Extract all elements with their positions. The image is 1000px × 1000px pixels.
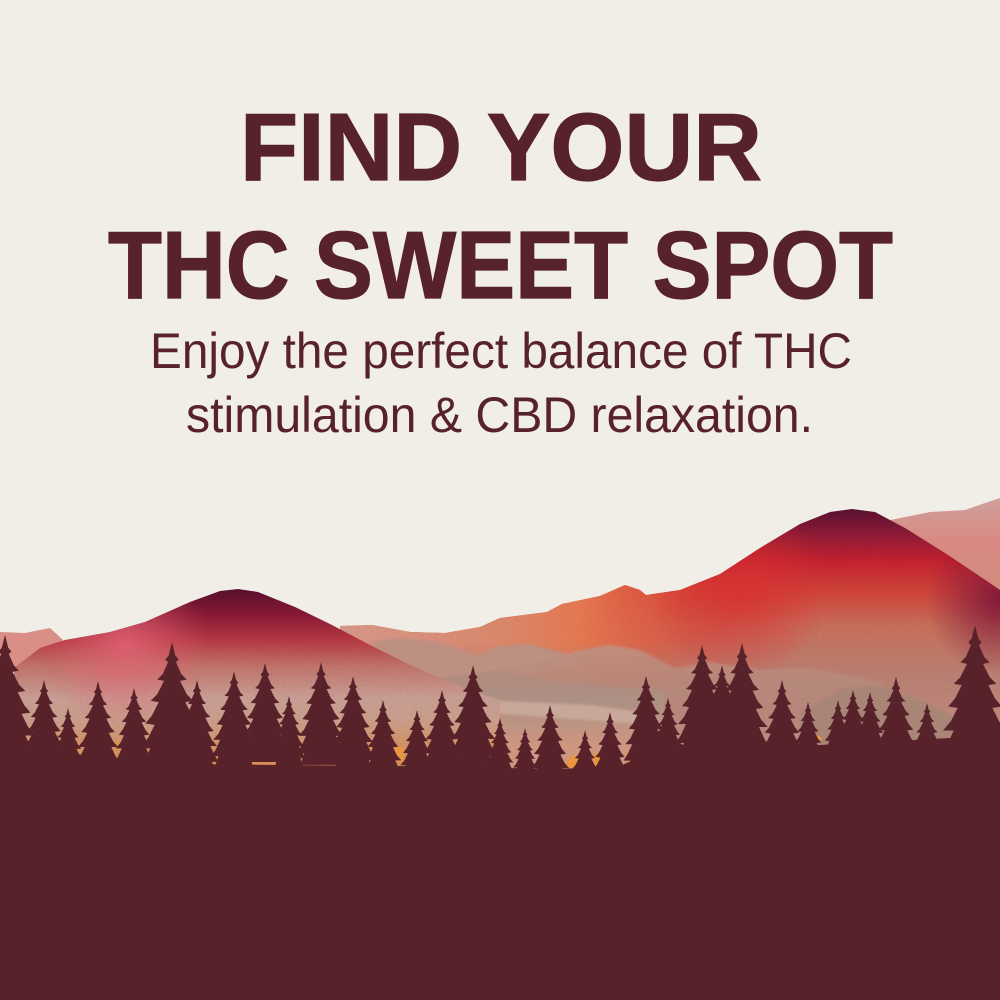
title: FIND YOUR (240, 94, 762, 201)
right trees (676, 625, 1000, 776)
subtitle: stimulation & CBD relaxation. (186, 387, 813, 443)
left mountain (14, 589, 500, 766)
subtitle: Enjoy the perfect balance of THC (150, 323, 852, 379)
left trees (0, 635, 515, 789)
subtitle (150, 323, 852, 443)
title: THC SWEET SPOT (108, 212, 893, 319)
mountain landscape (0, 498, 1000, 780)
far ridge right (860, 498, 1000, 640)
orange flecks under trees (52, 735, 822, 768)
ground (0, 728, 1000, 1000)
mid-distance hills (372, 638, 965, 770)
title (108, 94, 893, 319)
big right mountain (330, 500, 1000, 780)
centre trees (512, 676, 684, 800)
forest silhouette (0, 625, 1000, 1000)
far ridge left (0, 628, 63, 670)
